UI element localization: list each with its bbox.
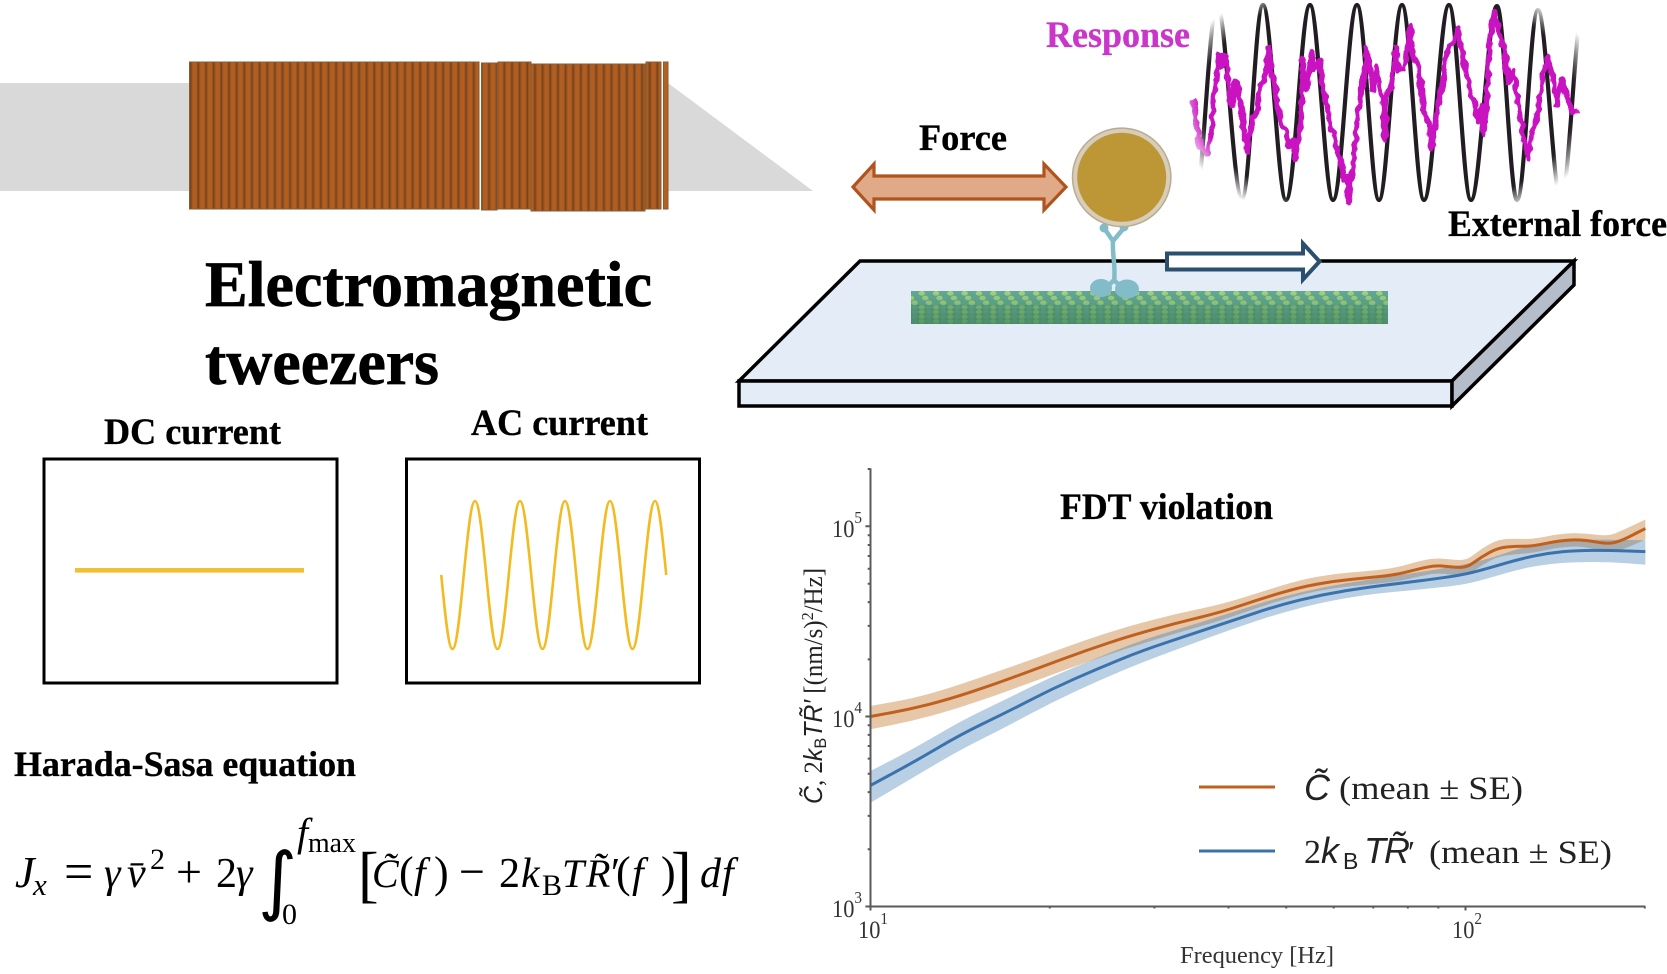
equation: f <box>632 851 649 897</box>
equation: [ <box>358 841 379 909</box>
y tick labels <box>832 508 862 923</box>
response and external force waves <box>1193 5 1583 203</box>
y tick labels: 10 <box>832 516 857 543</box>
kinesin motor <box>1090 222 1139 298</box>
magnet core <box>0 83 813 191</box>
external force wave <box>1195 5 1583 200</box>
blue band <box>870 540 1645 803</box>
legend: R curve: ′ <box>1408 834 1415 870</box>
equation: 2 <box>150 843 165 876</box>
y axis label: C̃, 2k <box>798 748 828 804</box>
blue mean curve <box>870 550 1645 785</box>
chart: FDT violation <box>798 468 1645 969</box>
y axis label: 2 <box>798 612 817 620</box>
orange mean curve <box>870 529 1645 717</box>
heading: AC current: AC current <box>471 402 648 443</box>
label: Force: Force <box>919 117 1007 158</box>
equation: + <box>176 846 202 897</box>
equation: ] <box>671 841 692 909</box>
y tick labels: 4 <box>854 698 862 717</box>
equation: d <box>700 851 722 897</box>
title: tweezers <box>205 327 439 399</box>
copper coil <box>190 62 668 211</box>
orange band <box>870 520 1645 729</box>
equation: ( <box>399 848 414 897</box>
equation: − <box>459 846 485 897</box>
legend: C curve: C̃ <box>1304 767 1331 808</box>
force double arrow <box>853 164 1066 210</box>
equation: J <box>15 848 37 897</box>
legend: R curve: (mean ± SE) <box>1429 835 1612 871</box>
equation: γ <box>236 851 254 897</box>
bead <box>1072 128 1171 226</box>
equation: v̄ <box>127 851 146 897</box>
legend: C curve <box>1199 767 1523 808</box>
legend: C curve: (mean ± SE) <box>1339 771 1523 807</box>
x tick labels: 2 <box>1474 909 1482 928</box>
title: Electromagnetic <box>205 249 652 321</box>
equation: ∫ <box>258 836 297 924</box>
equation <box>15 810 739 931</box>
equation: ′ <box>611 851 620 897</box>
y tick labels: 3 <box>854 888 862 907</box>
x tick labels: 10 <box>858 917 883 944</box>
x axis label: Frequency [Hz] <box>1180 943 1334 969</box>
equation: γ <box>104 851 122 897</box>
x tick labels: 1 <box>880 909 888 928</box>
DC signal line <box>75 568 304 573</box>
confidence bands and mean curves <box>865 468 1645 910</box>
y axis label: [(nm/s) <box>799 617 828 693</box>
legend: R curve <box>1199 830 1612 874</box>
title <box>205 249 652 399</box>
y axis label: TR̃′ <box>798 699 828 738</box>
x tick labels <box>858 909 1482 944</box>
y tick labels: 5 <box>854 508 862 527</box>
legend: R curve: 2 <box>1304 834 1321 871</box>
equation: R̃ <box>585 851 610 896</box>
equation: f <box>722 851 739 897</box>
legend: R curve: R̃ <box>1384 830 1410 871</box>
equation: max <box>308 827 356 859</box>
equation: k <box>521 851 541 897</box>
AC signal wave <box>441 501 666 649</box>
axes and ticks <box>865 468 1645 910</box>
y tick labels: 10 <box>832 896 857 923</box>
equation: ) <box>661 848 676 897</box>
response trace <box>1193 12 1578 203</box>
glass slide <box>739 261 1574 406</box>
y axis label: /Hz] <box>799 568 828 612</box>
legend: R curve: T <box>1364 830 1389 871</box>
chart title: FDT violation <box>1060 486 1273 527</box>
DC plot frame <box>44 459 337 683</box>
equation: 2 <box>499 851 520 897</box>
AC plot frame <box>406 459 700 683</box>
equation: B <box>542 869 562 902</box>
heading: DC current: DC current <box>104 411 281 452</box>
equation: T <box>562 851 587 896</box>
label: Response: Response <box>1046 15 1190 56</box>
y tick labels: 10 <box>832 706 857 733</box>
panel: kinesin bead assay <box>739 15 1667 406</box>
legend: R curve: k <box>1321 830 1341 871</box>
legend: R curve: B <box>1343 848 1358 874</box>
panel: DC current <box>44 411 337 683</box>
legend <box>1199 767 1612 874</box>
equation: x <box>32 867 47 902</box>
equation: f <box>297 810 313 855</box>
equation: ) <box>434 848 449 897</box>
motility direction arrow <box>1167 244 1320 280</box>
microtubule <box>911 291 1388 324</box>
equation: ( <box>616 848 631 897</box>
x tick labels: 10 <box>1452 917 1477 944</box>
equation: f <box>414 851 431 897</box>
panel: electromagnet <box>0 62 813 211</box>
equation: 0 <box>282 898 297 931</box>
panel: AC current <box>406 402 700 683</box>
equation: = <box>64 844 93 901</box>
y axis label: B <box>811 738 830 749</box>
heading: Harada-Sasa equation: Harada-Sasa equation <box>14 744 356 784</box>
equation: 2 <box>216 851 237 897</box>
equation: C̃ <box>372 851 400 896</box>
